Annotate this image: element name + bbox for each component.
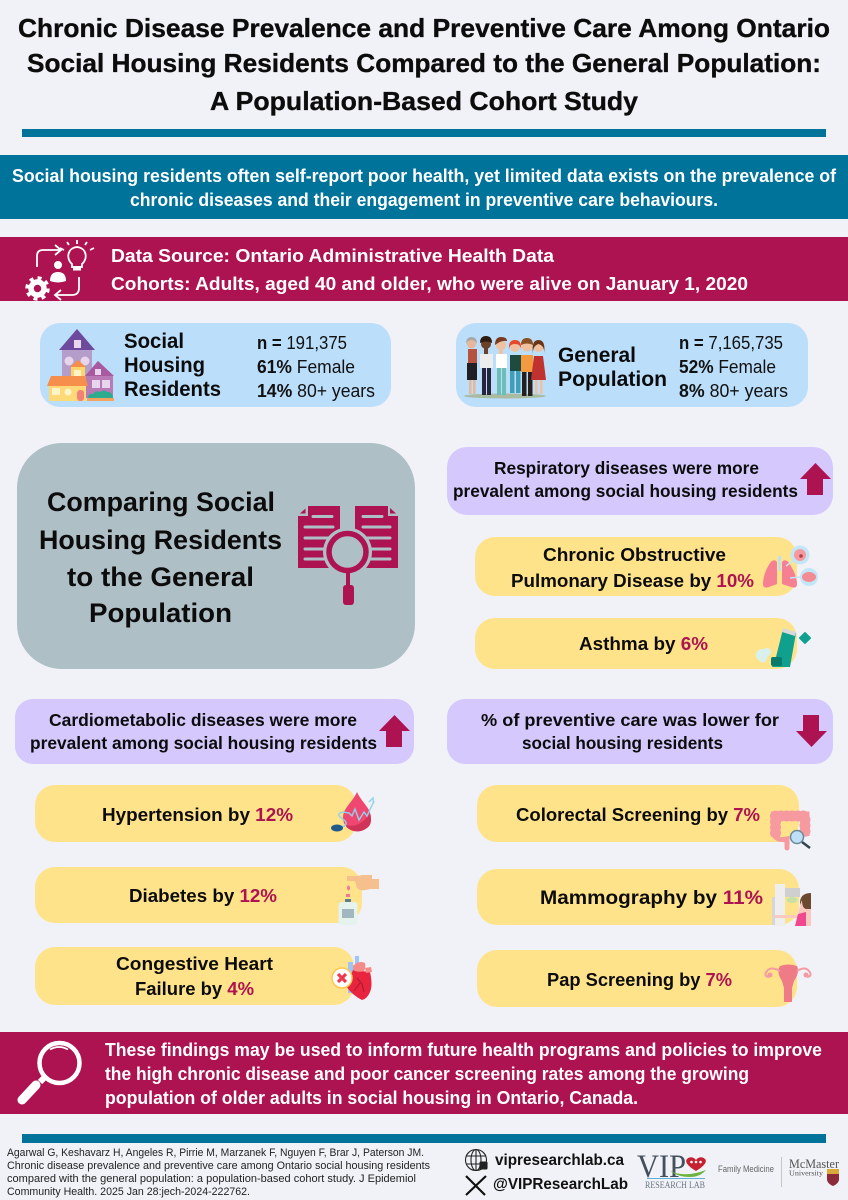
citation: compared with the general population: a population-based cohort study. J Epidemiol bbox=[7, 1173, 416, 1185]
panel: respiratory diseases header: prevalent among social housing residents bbox=[453, 481, 798, 501]
citation: Agarwal G, Keshavarz H, Angeles R, Pirrie M, Marzanek F, Nguyen F, Brar J, Paterson JM. bbox=[7, 1147, 424, 1159]
citation bbox=[7, 1147, 430, 1198]
callout: COPD: Pulmonary Disease by 10% bbox=[511, 571, 754, 591]
panel: respiratory diseases header bbox=[447, 447, 833, 515]
heading: comparing: Population bbox=[89, 598, 232, 628]
heading: social housing residents: Residents bbox=[124, 378, 221, 401]
callout: colorectal screening bbox=[477, 785, 810, 848]
logo: VIP research lab: VIP bbox=[637, 1149, 686, 1185]
icon: glucose meter and hand bbox=[338, 875, 379, 925]
citation: Community Health. 2025 Jan 28:jech-2024-222762. bbox=[7, 1186, 250, 1198]
heading: social housing residents: Housing bbox=[124, 354, 205, 377]
title: Chronic Disease Prevalence and Preventive Care Among Ontario bbox=[18, 13, 830, 43]
callout: mammography: Mammography by 11% bbox=[540, 888, 763, 909]
intro banner bbox=[0, 155, 848, 219]
icon: mammography machine bbox=[772, 884, 811, 926]
panel: cardiometabolic diseases header bbox=[15, 699, 414, 764]
callout: pap screening bbox=[477, 950, 811, 1007]
title: A Population-Based Cohort Study bbox=[210, 86, 639, 116]
data source banner bbox=[0, 237, 848, 301]
callout: COPD bbox=[475, 537, 818, 596]
cohort stats bbox=[679, 333, 788, 401]
callout: pap screening: Pap Screening by 7% bbox=[547, 970, 732, 990]
callout: COPD: Chronic Obstructive bbox=[543, 545, 726, 565]
panel: social housing residents cohort bbox=[40, 323, 391, 407]
cohort stats: 61% Female bbox=[257, 357, 355, 377]
icon: inhaler bbox=[756, 628, 811, 667]
arrow: up bbox=[379, 715, 410, 747]
panel: preventive care header: % of preventive care was lower for bbox=[481, 710, 779, 730]
icon: documents and magnifier bbox=[298, 506, 398, 605]
callout: diabetes bbox=[35, 867, 379, 925]
title: Social Housing Residents Compared to the General Population: bbox=[27, 48, 821, 78]
arrow: down bbox=[796, 715, 827, 747]
cohort stats: n = 7,165,735 bbox=[679, 333, 783, 353]
arrow: up bbox=[800, 463, 831, 495]
callout: mammography bbox=[477, 869, 811, 926]
logo: VIP research lab bbox=[637, 1149, 706, 1191]
intro banner: Social housing residents often self-report poor health, yet limited data exists on the prevalence of bbox=[12, 166, 837, 186]
heading: general population: Population bbox=[558, 368, 667, 391]
heading: social housing residents: Social bbox=[124, 330, 184, 353]
heading: comparing bbox=[39, 487, 282, 628]
heading: comparing: Housing Residents bbox=[39, 525, 282, 555]
callout: congestive heart failure: Congestive Heart bbox=[116, 954, 273, 974]
callout: asthma bbox=[475, 618, 811, 669]
heading: general population bbox=[558, 344, 667, 391]
conclusion banner bbox=[0, 1032, 848, 1114]
icon: houses bbox=[47, 329, 114, 401]
panel: comparing heading bbox=[17, 443, 415, 669]
panel: cardiometabolic diseases header: prevalent among social housing residents bbox=[30, 733, 377, 753]
callout: colorectal screening: Colorectal Screening by 7% bbox=[516, 805, 760, 825]
website link: vipresearchlab.ca bbox=[495, 1152, 624, 1169]
intro banner: chronic diseases and their engagement in preventive care behaviours. bbox=[130, 190, 718, 210]
logo: McMaster University: McMaster bbox=[789, 1157, 840, 1171]
icon: X logo bbox=[466, 1176, 486, 1195]
logo: VIP research lab: RESEARCH LAB bbox=[645, 1181, 705, 1191]
panel: preventive care header bbox=[447, 699, 833, 764]
icon: heart bbox=[332, 956, 372, 1000]
logo: McMaster University: University bbox=[789, 1168, 823, 1178]
icon: magnifier bbox=[22, 1043, 80, 1100]
icon: group of people bbox=[464, 336, 546, 398]
conclusion banner: population of older adults in social housing in Ontario, Canada. bbox=[105, 1088, 638, 1108]
cohort stats: n = 191,375 bbox=[257, 333, 347, 353]
cohort stats: 8% 80+ years bbox=[679, 381, 788, 401]
conclusion banner: These findings may be used to inform future health programs and policies to improve bbox=[105, 1040, 822, 1060]
data source banner: Data Source: Ontario Administrative Health Data bbox=[111, 246, 555, 266]
callout: hypertension: Hypertension by 12% bbox=[102, 805, 293, 825]
callout: asthma: Asthma by 6% bbox=[579, 634, 708, 654]
icon: lungs bbox=[763, 546, 818, 588]
cohort stats bbox=[257, 333, 375, 401]
panel: preventive care header: social housing residents bbox=[522, 733, 723, 753]
icon: globe bbox=[466, 1150, 487, 1170]
cohort stats: 14% 80+ years bbox=[257, 381, 375, 401]
callout: congestive heart failure: Failure by 4% bbox=[135, 979, 254, 999]
social handle: @VIPResearchLab bbox=[493, 1176, 628, 1193]
panel: cardiometabolic diseases header: Cardiometabolic diseases were more bbox=[49, 710, 357, 730]
callout: diabetes: Diabetes by 12% bbox=[129, 886, 277, 906]
callout: hypertension bbox=[35, 785, 374, 842]
heading: general population: General bbox=[558, 344, 636, 367]
callout: congestive heart failure bbox=[35, 947, 372, 1005]
icon: blood drop bbox=[331, 792, 374, 832]
citation: Chronic disease prevalence and preventive care among Ontario social housing residents bbox=[7, 1160, 430, 1172]
title bbox=[18, 13, 830, 116]
heading: social housing residents bbox=[124, 330, 221, 401]
icon: data cycle bbox=[27, 240, 94, 300]
logo: family medicine: Family Medicine bbox=[718, 1164, 774, 1174]
heading: comparing: Comparing Social bbox=[47, 487, 275, 517]
conclusion banner: the high chronic disease and poor cancer screening rates among the growing bbox=[105, 1064, 749, 1084]
icon: uterus bbox=[765, 964, 811, 1002]
data source banner: Cohorts: Adults, aged 40 and older, who were alive on January 1, 2020 bbox=[111, 274, 748, 294]
logo: McMaster University bbox=[789, 1157, 840, 1186]
icon: colon and magnifier bbox=[775, 816, 810, 848]
panel: general population cohort bbox=[456, 323, 808, 407]
cohort stats: 52% Female bbox=[679, 357, 776, 377]
heading: comparing: to the General bbox=[67, 562, 254, 592]
panel: respiratory diseases header: Respiratory diseases were more bbox=[494, 458, 759, 478]
